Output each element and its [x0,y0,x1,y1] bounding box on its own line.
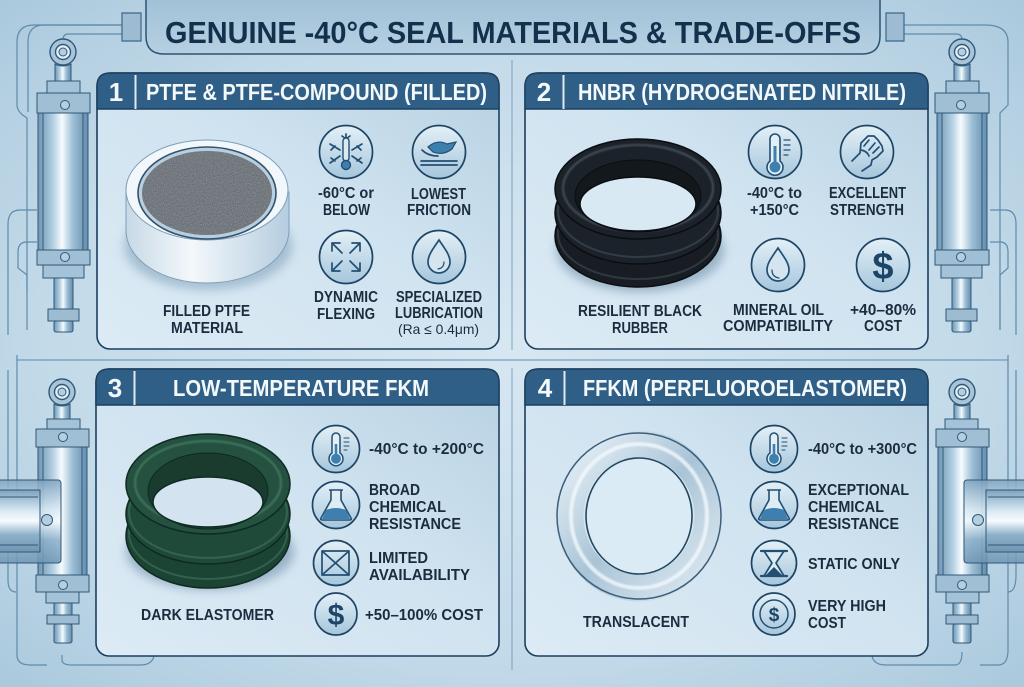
icon: fist [840,126,894,178]
icon: thermometer [312,426,360,472]
icon: hourglass [752,540,796,586]
text: temperature range: -40°C to [747,185,802,202]
text: specialized lubrication: LUBRICATION [395,305,483,322]
icon: dollar: $ [328,599,345,632]
text: static only: STATIC ONLY [808,556,901,573]
text: very high cost: VERY HIGH [808,598,886,615]
text: temperature range [747,185,802,219]
label: filled PTFE material: MATERIAL [171,320,243,337]
icon: flexing arrows [320,230,372,284]
text: limited availability: AVAILABILITY [369,567,471,584]
cylinder: top right [935,39,989,332]
icon: crossed-out box [314,540,358,586]
panel: FFKM [525,369,928,656]
cylinder: top left [37,39,90,332]
text: exceptional chemical resistance: RESISTANCE [808,516,899,533]
text: excellent strength: EXCELLENT [829,185,906,202]
text: cost premium: COST [864,318,902,335]
image: filled PTFE puck [124,140,292,290]
cylinder: bottom left with clamp [0,379,89,643]
icon: chemical flask [312,482,360,528]
icon: coin: $ [769,605,780,626]
icon: snowflake thermometer [320,126,372,178]
icon: chemical flask [750,482,798,528]
title banner [122,0,904,54]
panel header: LOW-TEMPERATURE FKM [173,375,429,401]
text: lowest friction: FRICTION [407,202,471,219]
panel: HNBR [525,73,928,349]
label: resilient black rubber: RUBBER [612,320,668,337]
text: exceptional chemical resistance [808,482,909,533]
panel header: 3 [108,373,122,403]
panel header: FFKM (PERFLUOROELASTOMER) [583,375,907,401]
text: exceptional chemical resistance: EXCEPTIONAL [808,482,909,499]
panel header: HNBR (HYDROGENATED NITRILE) [578,79,906,105]
text: limited availability: LIMITED [369,550,428,567]
text: cost premium: +40–80% [850,302,916,319]
icon: thermometer [750,426,798,472]
text: dynamic flexing [314,289,378,323]
text: broad chemical resistance: CHEMICAL [369,499,446,516]
text: temperature range: -40°C to +300°C [808,441,917,458]
icon: thermometer [748,126,802,178]
cylinder: bottom right with clamp [936,379,1024,643]
text: specialized lubrication: (Ra ≤ 0.4μm) [398,321,479,337]
text: broad chemical resistance [369,482,461,533]
text: specialized lubrication [395,289,483,337]
label: filled PTFE material [163,303,250,337]
panel: low-temperature FKM [96,369,499,656]
label: translucent: TRANSLACENT [583,614,689,631]
text: specialized lubrication: SPECIALIZED [396,289,482,306]
panel header: 1 [109,77,123,107]
icon: oil drop [752,238,804,292]
text: mineral oil compatibility [723,302,834,335]
text: -60°C or below: BELOW [323,202,370,219]
text: dynamic flexing: DYNAMIC [314,289,378,306]
text: broad chemical resistance: BROAD [369,482,420,499]
text: cost premium: +50–100% COST [365,607,484,624]
text: temperature range: +150°C [750,202,799,219]
text: excellent strength [829,185,906,219]
icon: lubrication drop [412,230,466,284]
icon: dollar: $ [872,246,894,288]
panel header: 4 [538,373,553,403]
label: resilient black rubber [578,303,703,337]
icon: low friction [412,126,466,178]
text: -60°C or below [318,185,374,219]
label: filled PTFE material: FILLED PTFE [163,303,250,320]
icon: coin [753,593,795,635]
text: dynamic flexing: FLEXING [317,306,375,323]
icon: dollar [315,593,357,635]
panel header [97,73,499,109]
text: mineral oil compatibility: MINERAL OIL [733,302,824,319]
text: lowest friction: LOWEST [411,186,466,203]
text: very high cost: COST [808,615,846,632]
text: very high cost [808,598,886,632]
text: mineral oil compatibility: COMPATIBILITY [723,318,834,335]
icon: dollar [856,238,910,292]
panel header [525,369,928,405]
text: excellent strength: STRENGTH [830,202,904,219]
label: resilient black rubber: RESILIENT BLACK [578,303,703,320]
text: -60°C or below: -60°C or [318,185,374,202]
image: translucent ring [557,433,721,599]
text: broad chemical resistance: RESISTANCE [369,516,461,533]
label: dark elastomer: DARK ELASTOMER [141,607,274,624]
panel header: 2 [537,77,551,107]
text: limited availability [369,550,471,584]
title text: GENUINE -40°C SEAL MATERIALS & TRADE-OFFS [165,15,861,50]
panel: PTFE [97,73,499,349]
panel header [525,73,928,109]
text: cost premium [850,302,916,335]
text: lowest friction [407,186,471,219]
panel header: PTFE & PTFE-COMPOUND (FILLED) [146,79,487,105]
image: dark green elastomer seal [126,434,294,590]
text: exceptional chemical resistance: CHEMICAL [808,499,884,516]
panel header [96,369,499,405]
image: black rubber seal [555,139,724,292]
text: temperature range: -40°C to +200°C [369,441,484,458]
